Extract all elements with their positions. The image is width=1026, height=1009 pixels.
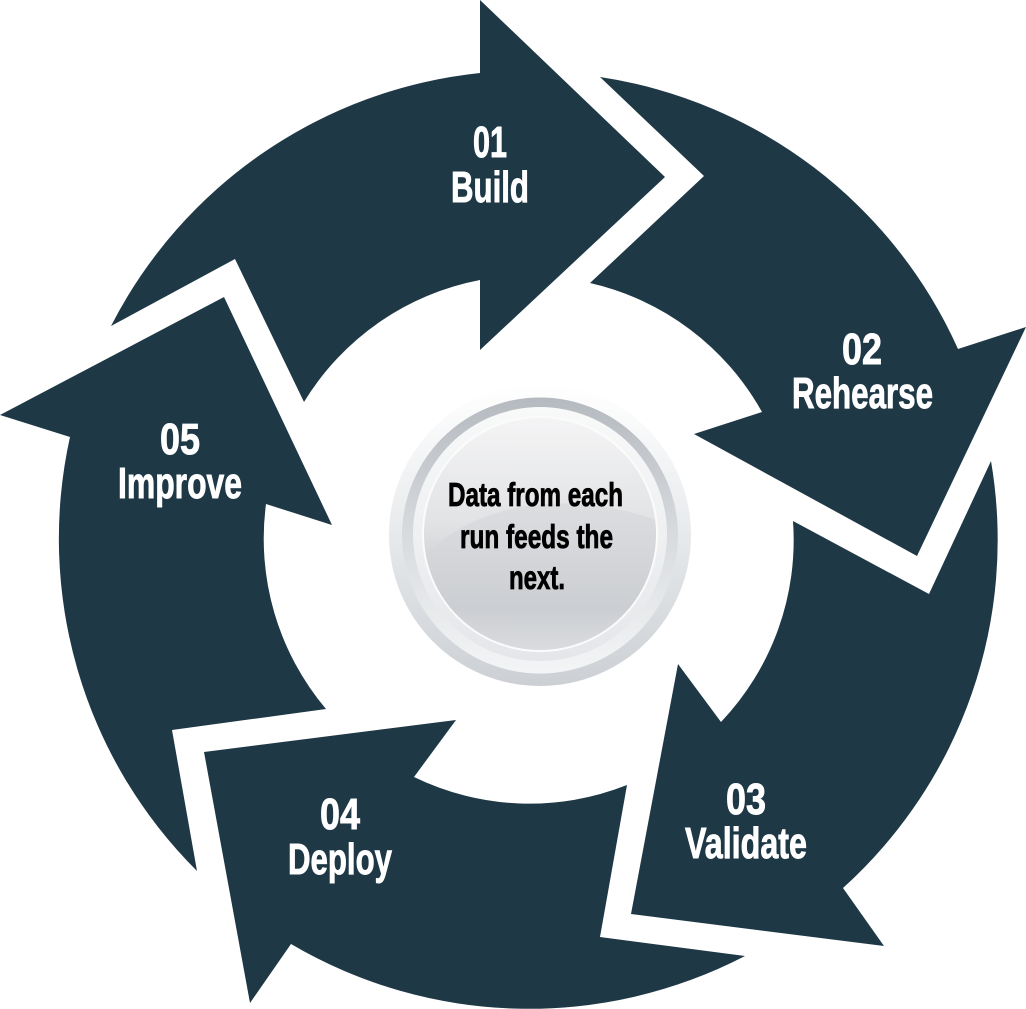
arrow 02 Rehearse	[590, 77, 1026, 556]
label: 02 Rehearse	[792, 325, 933, 418]
label: 01 Build	[451, 118, 529, 212]
center text: next.	[509, 559, 565, 596]
label: 04 Deploy: Deploy	[288, 835, 392, 884]
center text: run feeds the	[460, 518, 613, 555]
arrow 04 Deploy	[204, 720, 745, 1009]
label: 01 Build: 01	[473, 118, 507, 167]
center badge	[389, 384, 691, 686]
label: 05 Improve: Improve	[118, 459, 242, 508]
label: 02 Rehearse: 02	[842, 325, 882, 374]
label: 04 Deploy: 04	[320, 790, 360, 839]
label: 03 Validate: 03	[726, 775, 766, 824]
label: 05 Improve	[118, 415, 242, 508]
center text: Data from each	[448, 476, 623, 513]
label: 04 Deploy	[288, 790, 392, 884]
center text	[448, 476, 623, 596]
label: 03 Validate: Validate	[685, 819, 807, 868]
label: 01 Build: Build	[451, 163, 529, 212]
label: 02 Rehearse: Rehearse	[792, 369, 933, 418]
label: 05 Improve: 05	[160, 415, 200, 464]
arrow 03 Validate	[631, 461, 998, 946]
label: 03 Validate	[685, 775, 807, 868]
arrow 01 Build	[111, 0, 665, 402]
arrow 05 Improve	[0, 297, 332, 871]
